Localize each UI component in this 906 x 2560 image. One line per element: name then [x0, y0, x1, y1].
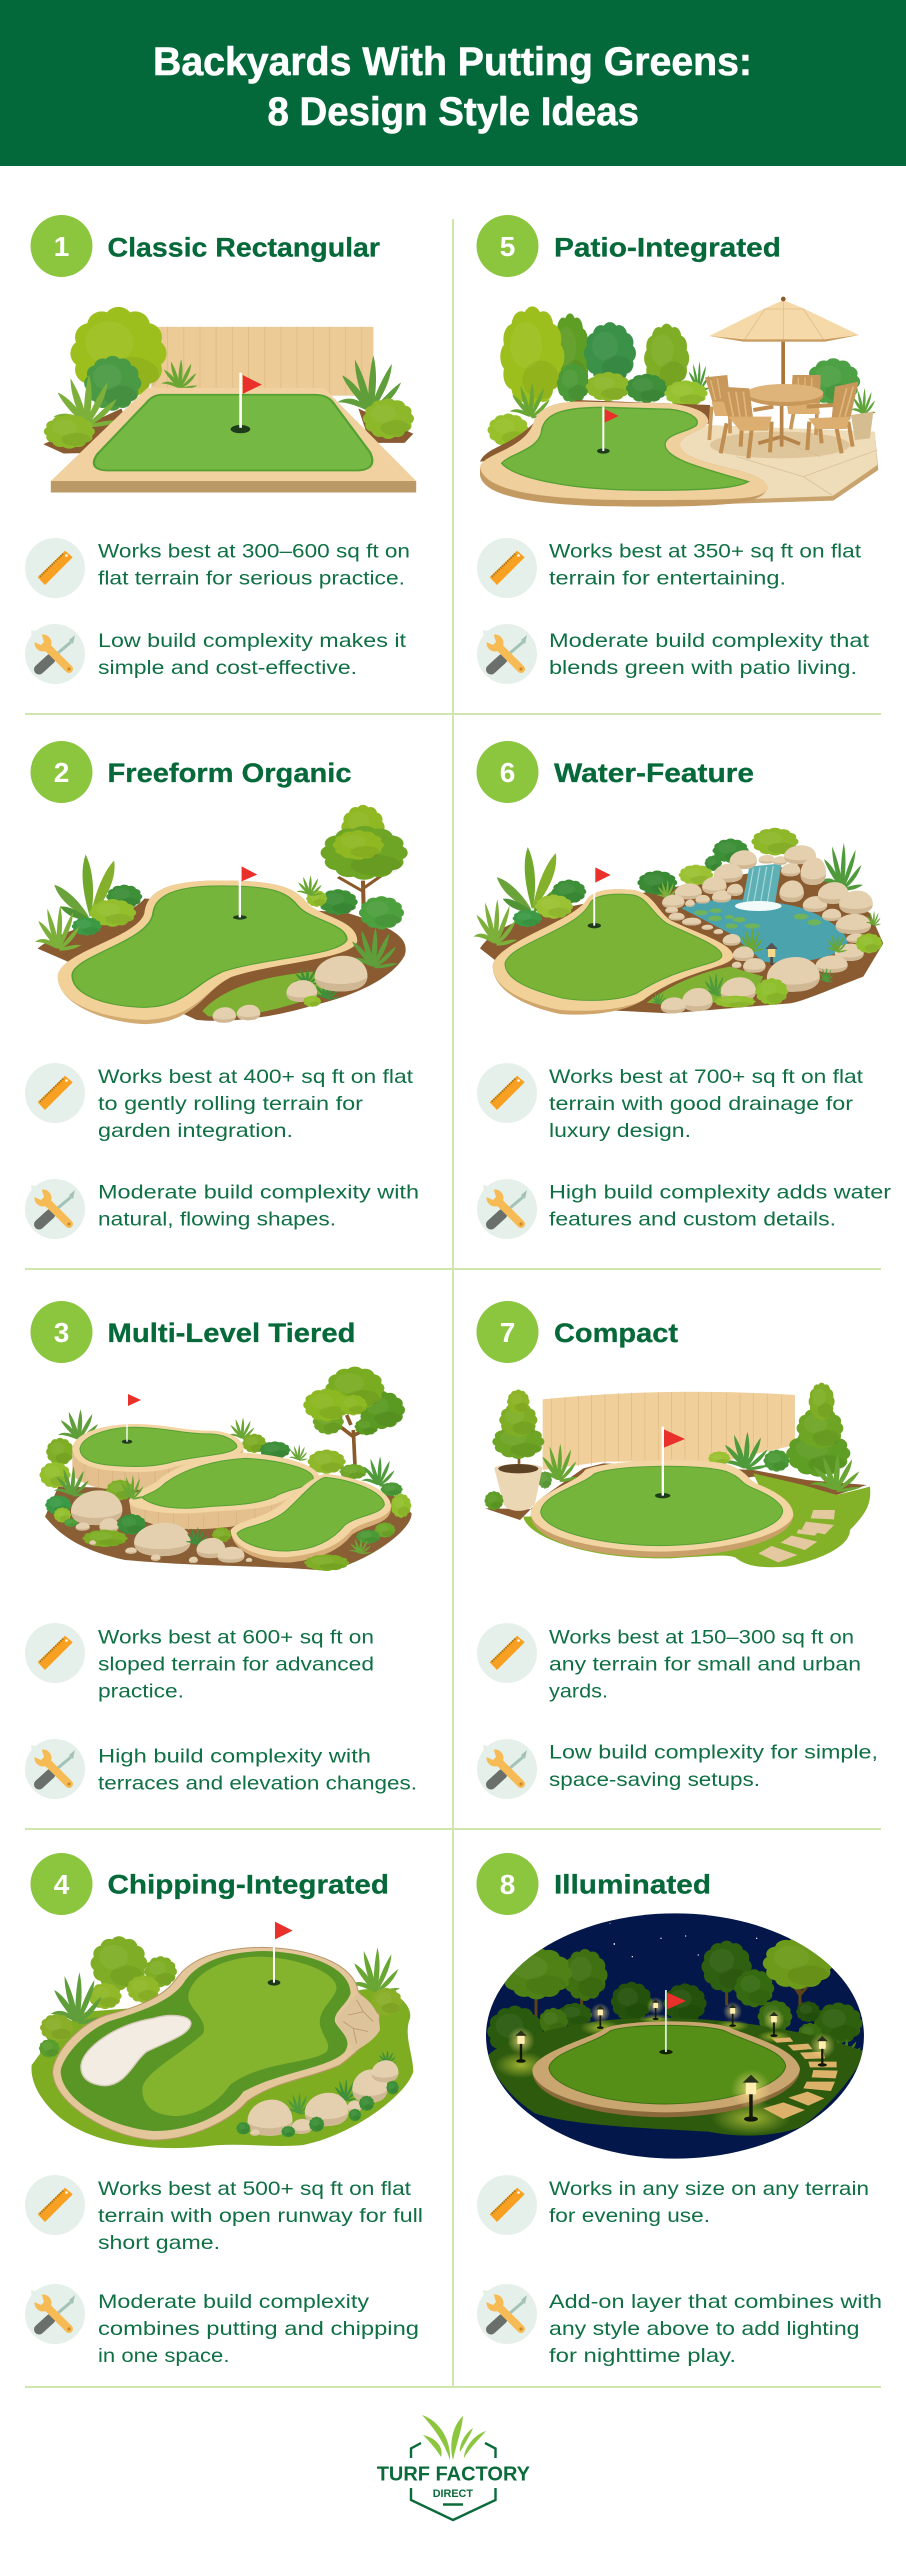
size note: for evening use.	[549, 2205, 710, 2227]
size note: Works best at 600+ sq ft on	[98, 1626, 374, 1648]
wordmark: TURF FACTORY	[377, 2464, 531, 2486]
complexity note	[477, 1179, 892, 1239]
complexity note: High build complexity with	[98, 1746, 371, 1768]
umbrella and table set	[705, 297, 859, 458]
size note: sloped terrain for advanced	[98, 1654, 374, 1676]
tree	[303, 1367, 405, 1465]
badge outline	[411, 2443, 496, 2520]
size note: practice.	[98, 1680, 184, 1702]
tree	[321, 805, 408, 931]
size note: terrain with open runway for full	[98, 2205, 423, 2227]
title	[153, 40, 752, 134]
heading: Water-Feature: Water-Feature	[554, 758, 754, 788]
number badge 7: 7	[500, 1317, 515, 1348]
title: Backyards With Putting Greens:	[153, 40, 752, 84]
size note: to gently rolling terrain for	[98, 1093, 364, 1115]
complexity note: simple and cost-effective.	[98, 657, 357, 679]
size note	[25, 1063, 414, 1142]
complexity note	[25, 1739, 417, 1799]
heading: Patio-Integrated: Patio-Integrated	[554, 232, 781, 262]
number badge 2	[30, 741, 92, 803]
number badge 6: 6	[500, 757, 515, 788]
middle tier	[129, 1453, 321, 1530]
night trees	[487, 1937, 863, 2058]
complexity note: combines putting and chipping	[98, 2318, 419, 2340]
size note: Works best at 500+ sq ft on flat	[98, 2178, 412, 2200]
complexity note	[25, 1179, 419, 1239]
number badge 1: 1	[54, 231, 69, 262]
panel: 4 Chipping-Integrated	[25, 1853, 423, 2367]
number badge 8: 8	[500, 1869, 515, 1900]
size note: Works best at 150–300 sq ft on	[549, 1626, 854, 1648]
waterfall	[735, 863, 782, 911]
number badge 1	[30, 215, 92, 277]
complexity note	[477, 1739, 878, 1799]
complexity note: natural, flowing shapes.	[98, 1208, 336, 1230]
heading: Compact: Compact	[554, 1318, 678, 1348]
size note	[477, 538, 862, 598]
complexity note: features and custom details.	[549, 1208, 836, 1230]
logo: Turf Factory Direct	[377, 2415, 531, 2520]
size note: garden integration.	[98, 1120, 293, 1142]
size note: Works best at 700+ sq ft on flat	[549, 1066, 864, 1088]
number badge 3: 3	[54, 1317, 69, 1348]
size note: luxury design.	[549, 1120, 691, 1142]
illustration: tiered greens	[39, 1367, 412, 1571]
top tier	[72, 1393, 243, 1491]
potted topiary	[484, 1390, 578, 1511]
number badge 3	[30, 1301, 92, 1363]
heading: Chipping-Integrated: Chipping-Integrated	[108, 1870, 389, 1900]
complexity note	[477, 624, 870, 684]
complexity note: Moderate build complexity with	[98, 1182, 419, 1204]
number badge 6	[476, 741, 538, 803]
complexity note: Moderate build complexity that	[549, 630, 870, 652]
complexity note: Add-on layer that combines with	[549, 2291, 882, 2313]
lantern	[765, 943, 778, 965]
size note	[25, 2175, 423, 2254]
size note	[25, 538, 410, 598]
illustration: night-lit green	[486, 1913, 865, 2159]
illustration: water feature green	[474, 828, 883, 1015]
illustration: freeform green	[35, 805, 408, 1024]
size note: Works best at 400+ sq ft on flat	[98, 1066, 414, 1088]
complexity note: Moderate build complexity	[98, 2291, 369, 2313]
number badge 5	[476, 215, 538, 277]
number badge 4: 4	[54, 1869, 70, 1900]
number badge 7	[476, 1301, 538, 1363]
heading: Multi-Level Tiered: Multi-Level Tiered	[108, 1318, 356, 1348]
icon: grass blades	[422, 2415, 486, 2460]
wordmark: direct: DIRECT	[433, 2488, 473, 2500]
complexity note: Low build complexity makes it	[98, 630, 407, 652]
stepping stones	[758, 1510, 835, 1562]
size note	[477, 2175, 869, 2235]
number badge 4	[30, 1853, 92, 1915]
complexity note	[477, 2284, 882, 2367]
illustration: compact green	[484, 1383, 870, 1567]
light pools	[494, 2014, 791, 2135]
size note	[25, 1623, 374, 1702]
size note	[477, 1623, 861, 1702]
size note	[477, 1063, 864, 1142]
panel: 8 Illuminated	[476, 1853, 882, 2367]
number badge 8	[476, 1853, 538, 1915]
complexity note: Low build complexity for simple,	[549, 1742, 878, 1764]
heading: Classic Rectangular: Classic Rectangular	[108, 232, 381, 262]
stepping stones	[763, 2037, 838, 2119]
complexity note: space-saving setups.	[549, 1769, 760, 1791]
illustration: patio green	[480, 297, 878, 507]
size note: yards.	[549, 1680, 608, 1702]
lower tier	[231, 1474, 391, 1563]
size note: terrain for entertaining.	[549, 568, 786, 590]
panel: 2 Freeform Organic	[25, 741, 419, 1239]
heading: Illuminated: Illuminated	[554, 1870, 711, 1900]
illustration: classic rectangular green	[43, 307, 416, 493]
panel: 7 Compact	[476, 1301, 878, 1799]
panel: 5 Patio-Integrated	[476, 215, 878, 684]
size note: flat terrain for serious practice.	[98, 568, 405, 590]
number badge 2: 2	[54, 757, 69, 788]
lily pads	[694, 908, 821, 929]
path lamps	[507, 1997, 835, 2122]
complexity note	[25, 624, 407, 684]
heading: Freeform Organic: Freeform Organic	[108, 758, 352, 788]
header banner	[0, 0, 906, 166]
pot plant	[851, 388, 876, 440]
size note: any terrain for small and urban	[549, 1654, 861, 1676]
illustration: chipping green	[31, 1922, 413, 2148]
size note: short game.	[98, 2232, 220, 2254]
complexity note: in one space.	[98, 2345, 230, 2367]
boulders	[662, 845, 873, 973]
complexity note: blends green with patio living.	[549, 657, 857, 679]
title: 8 Design Style Ideas	[268, 90, 639, 134]
panel: 1 Classic Rectangular	[25, 215, 416, 684]
panel: 6 Water-Feature	[474, 741, 892, 1239]
size note: terrain with good drainage for	[549, 1093, 854, 1115]
complexity note: for nighttime play.	[549, 2345, 736, 2367]
complexity note: any style above to add lighting	[549, 2318, 860, 2340]
size note: Works in any size on any terrain	[549, 2178, 869, 2200]
complexity note: terraces and elevation changes.	[98, 1772, 417, 1794]
size note: Works best at 300–600 sq ft on	[98, 540, 410, 562]
complexity note: High build complexity adds water	[549, 1182, 892, 1204]
number badge 5: 5	[500, 231, 515, 262]
complexity note	[25, 2284, 419, 2367]
size note: Works best at 350+ sq ft on flat	[549, 540, 862, 562]
panel: 3 Multi-Level Tiered	[25, 1301, 417, 1799]
